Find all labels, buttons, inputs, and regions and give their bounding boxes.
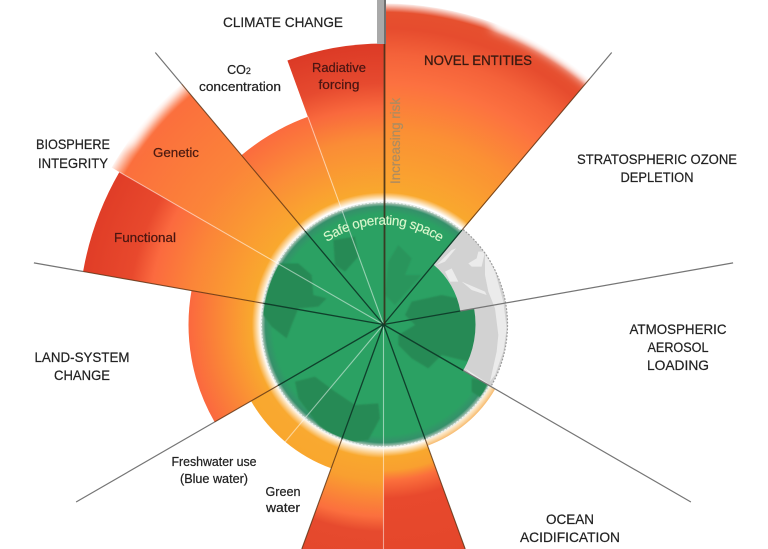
panel: freshwater wedge	[251, 324, 384, 468]
label: radiative forcing	[312, 61, 366, 92]
heading: ocean acidification: ACIDIFICATION	[520, 529, 620, 545]
novel entities soft outer fade	[495, 19, 601, 83]
heading: land-system change: CHANGE	[54, 367, 110, 383]
heading: stratospheric ozone depletion: STRATOSPHERIC OZONE	[577, 151, 737, 167]
label: green water	[265, 485, 301, 515]
ozone and aerosol depleted grey zone	[434, 230, 508, 386]
label: freshwater use blue water	[172, 455, 257, 486]
panel: radiative forcing wedge	[287, 44, 384, 324]
label: functional: Functional	[114, 231, 176, 245]
label: genetic: Genetic	[153, 146, 199, 160]
heading: biosphere integrity: INTEGRITY	[38, 155, 109, 171]
dark green boundary lines across globe	[263, 230, 463, 439]
label: radiative forcing: forcing	[318, 78, 360, 92]
increasing risk grey axis band	[377, 0, 385, 44]
panel: biogeochemical left wedge	[302, 324, 384, 549]
heading: biosphere integrity	[36, 136, 110, 171]
heading: atmospheric aerosol loading: ATMOSPHERIC	[630, 321, 726, 337]
label: CO2 concentration	[199, 63, 281, 94]
heading: ocean acidification	[520, 511, 620, 545]
globe: safe operating space	[258, 202, 506, 448]
label: green water: water	[265, 501, 300, 515]
panel: CO2 concentration wedge	[241, 117, 384, 324]
globe continents	[258, 237, 488, 443]
label: CO2 concentration: CO2	[227, 63, 251, 77]
increasing risk label: Increasing risk	[388, 98, 403, 184]
heading: land-system change	[34, 349, 130, 383]
label: freshwater use blue water: Freshwater use	[172, 455, 257, 469]
heading: land-system change: LAND-SYSTEM	[34, 349, 130, 365]
safe operating space label: Safe operating space	[324, 215, 442, 241]
axis line top	[384, 0, 386, 44]
central vertical axis	[384, 44, 386, 324]
brown boundary lines across wedges	[83, 79, 590, 549]
label: CO2 concentration: concentration	[199, 80, 281, 94]
label: green water: Green	[266, 485, 301, 499]
panel: land-system change wedge	[189, 291, 384, 422]
heading: stratospheric ozone depletion: DEPLETION	[620, 169, 694, 185]
panel: functional biosphere wedge	[83, 172, 383, 324]
heading: stratospheric ozone depletion	[577, 151, 737, 185]
panel: genetic biosphere wedge	[112, 84, 383, 324]
light sub-dividers	[119, 117, 384, 549]
label: radiative forcing: Radiative	[312, 61, 366, 75]
heading: biosphere integrity: BIOSPHERE	[36, 136, 110, 152]
outer grey boundary lines	[34, 52, 733, 502]
panel: biogeochemical right wedge	[384, 324, 465, 549]
genetic soft outer fade	[126, 80, 178, 144]
heading: atmospheric aerosol loading	[630, 321, 726, 373]
heading: novel entities: NOVEL ENTITIES	[424, 52, 532, 68]
heading: ocean acidification: OCEAN	[546, 511, 594, 527]
panel: ocean acidification rim	[384, 324, 495, 446]
heading: atmospheric aerosol loading: LOADING	[647, 357, 709, 373]
heading: climate change: CLIMATE CHANGE	[223, 14, 343, 30]
panel: novel entities wedge	[384, 4, 590, 324]
label: freshwater use blue water: (Blue water)	[180, 472, 248, 486]
heading: atmospheric aerosol loading: AEROSOL	[648, 339, 709, 355]
